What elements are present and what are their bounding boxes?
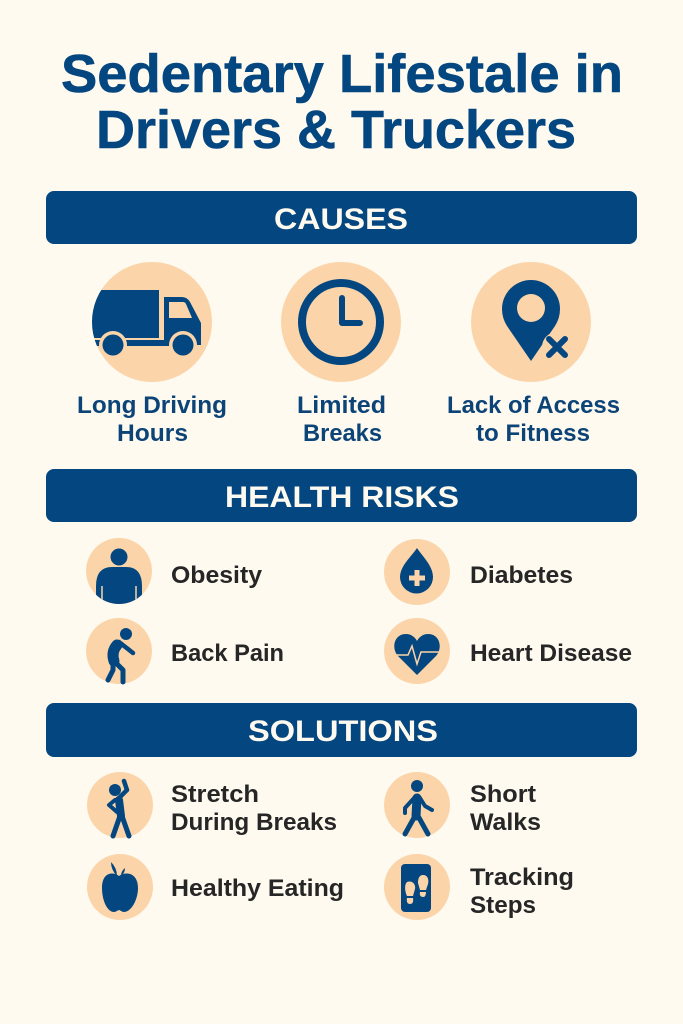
heading: causes: [46, 191, 637, 244]
label: back pain: Back Pain: [171, 640, 284, 667]
label: limited breaks: Breaks: [303, 420, 382, 447]
label: short walks: Walks: [470, 809, 541, 836]
label: lack of access to fitness: [447, 392, 620, 447]
label: limited breaks: [297, 392, 386, 447]
label: stretch during breaks: Stretch: [171, 781, 259, 808]
icon: blood drop: [384, 539, 450, 605]
icon: location pin with x: [471, 262, 591, 382]
label: short walks: Short: [470, 781, 536, 808]
label: tracking steps: Steps: [470, 892, 536, 919]
label: healthy eating: Healthy Eating: [171, 875, 344, 902]
label: limited breaks: Limited: [297, 392, 386, 419]
label: long driving hours: Hours: [117, 420, 188, 447]
label: heart disease: Heart Disease: [470, 640, 632, 667]
panel: solutions: [46, 703, 637, 920]
label: short walks: [470, 781, 541, 836]
icon: stretching figure: [87, 772, 153, 838]
icon: truck: [90, 262, 212, 382]
heading: solutions: SOLUTIONS: [248, 715, 438, 748]
heading: health risks: HEALTH RISKS: [225, 481, 459, 514]
title: Drivers & Truckers: [96, 100, 576, 160]
label: tracking steps: [470, 864, 574, 919]
label: lack of access to fitness: Lack of Access: [447, 392, 620, 419]
panel: health risks: [46, 469, 637, 684]
label: obesity: Obesity: [171, 562, 263, 589]
title: [61, 44, 623, 160]
label: stretch during breaks: During Breaks: [171, 809, 337, 836]
label: lack of access to fitness: to Fitness: [476, 420, 590, 447]
label: stretch during breaks: [171, 781, 337, 836]
icon: apple: [87, 854, 153, 920]
heading: health risks: [46, 469, 637, 522]
icon: step tracker: [384, 854, 450, 920]
icon: clock: [281, 262, 401, 382]
title: Sedentary Lifestale in: [61, 44, 623, 104]
icon: obesity: [86, 538, 152, 604]
label: long driving hours: [77, 392, 227, 447]
icon: heart with pulse: [384, 618, 450, 684]
panel: causes: [46, 191, 637, 447]
label: diabetes: Diabetes: [470, 562, 573, 589]
heading: causes: CAUSES: [274, 203, 408, 236]
heading: solutions: [46, 703, 637, 757]
label: long driving hours: Long Driving: [77, 392, 227, 419]
icon: walking figure: [384, 772, 450, 838]
label: tracking steps: Tracking: [470, 864, 574, 891]
icon: back pain figure: [86, 618, 152, 684]
